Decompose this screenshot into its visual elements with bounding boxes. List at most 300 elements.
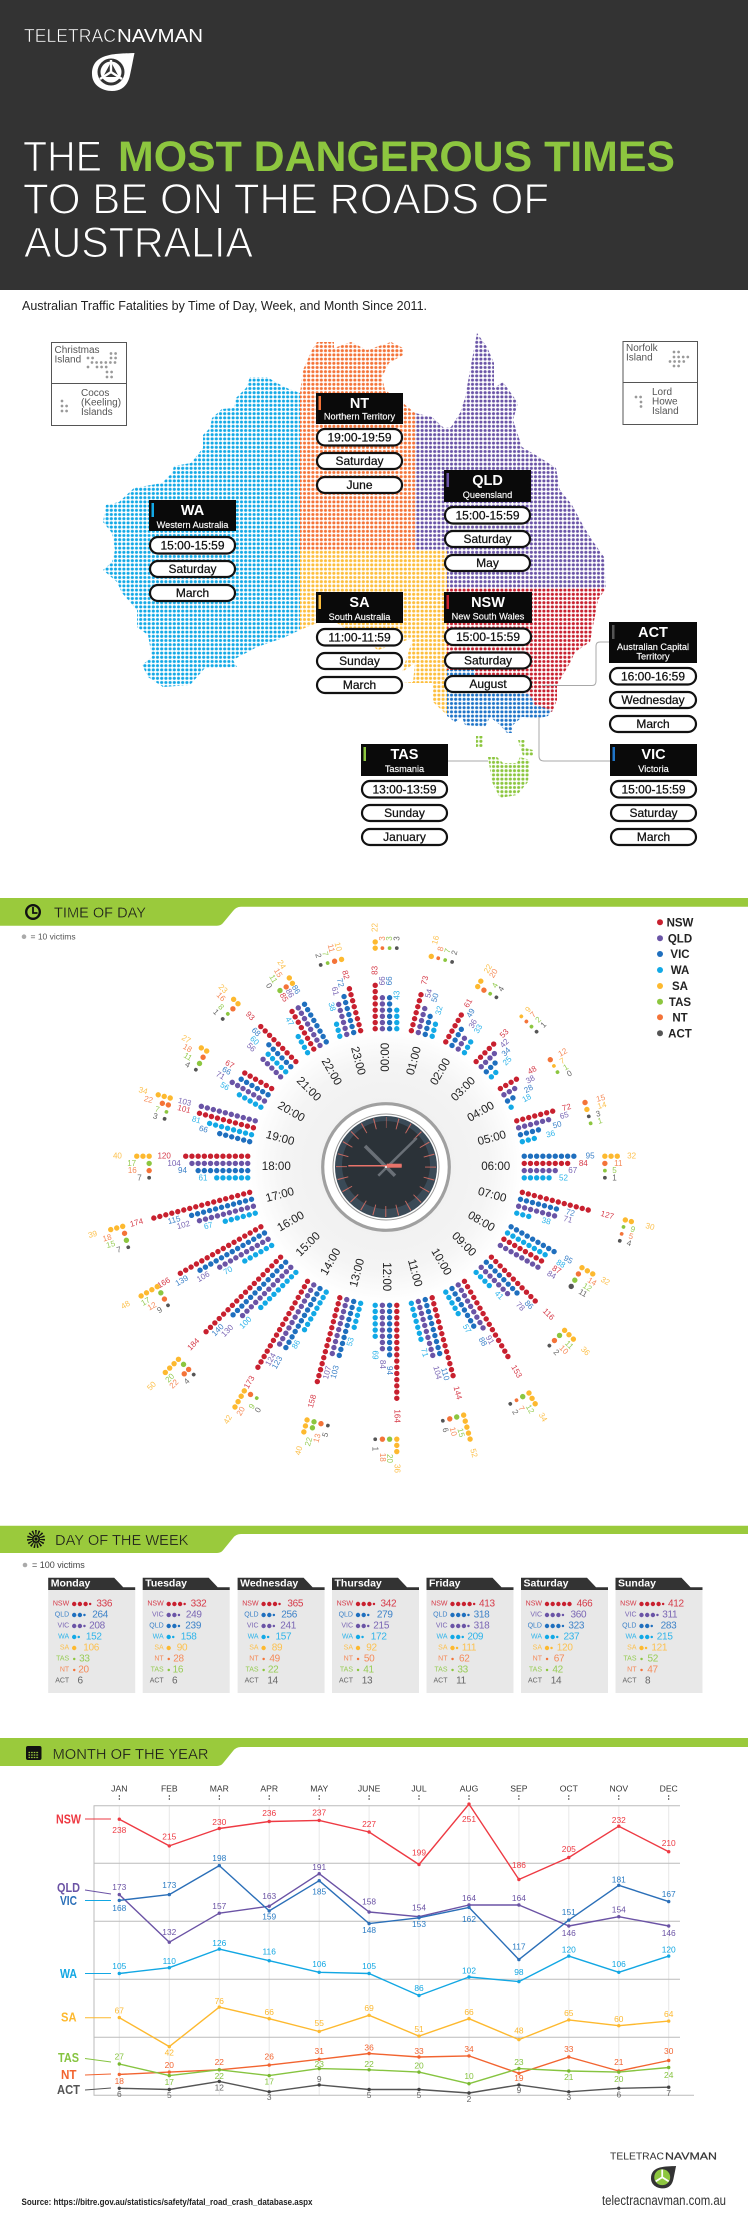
panel: Saturday: NSW	[526, 1600, 542, 1608]
month axis labels: JAN	[111, 1784, 127, 1794]
hour 03:00: 53	[498, 1027, 511, 1040]
series: SA: 65	[564, 2008, 574, 2018]
panel: Thursday: 172	[371, 1632, 387, 1642]
hour 07:00: 127	[600, 1209, 615, 1221]
hour 05:00: 1	[597, 1116, 604, 1126]
hour 09:00	[443, 1224, 592, 1373]
callout: NSW	[444, 592, 532, 692]
series: NT: 26	[265, 2052, 274, 2062]
section heading: Time of Day	[0, 898, 748, 926]
callout: ACT: Australian Capital	[617, 642, 689, 652]
hour 20:00: 27	[180, 1033, 193, 1046]
panel: Sunday: 311	[662, 1610, 678, 1620]
series: TAS: 20	[414, 2061, 424, 2071]
callout: VIC	[610, 744, 697, 845]
hour 22:00: 86	[284, 987, 296, 1000]
section heading: Time of Day: TIME OF DAY	[54, 904, 146, 922]
hour 14:00: 42	[222, 1413, 234, 1426]
hour 01:00: 32	[434, 1004, 445, 1016]
hour 02:00: 20	[487, 967, 500, 980]
panel: Thursday: TAS	[340, 1666, 353, 1674]
panel: Wednesday: 49	[269, 1654, 281, 1664]
hour 23:00: 61	[330, 986, 341, 997]
hour 11:00: 11:00	[405, 1258, 424, 1288]
section heading: Month of the Year: MONTH OF THE YEAR	[52, 1746, 209, 1763]
panel: Friday: QLD	[433, 1612, 448, 1618]
chart: fatalities by hour, radial dot rows	[87, 923, 656, 1473]
hour 19:00: 101	[176, 1103, 192, 1115]
hour 18:00: 94	[178, 1166, 188, 1175]
hour 11:00: 52	[468, 1448, 479, 1459]
hour 07:00: 4	[626, 1238, 633, 1248]
footer wordmark: TELETRAC	[610, 2150, 664, 2162]
series: VIC: 162	[462, 1914, 476, 1924]
panel: dot map of Australia	[52, 333, 698, 845]
series: NSW: 251	[462, 1814, 476, 1824]
panel: Friday: TAS	[434, 1666, 448, 1674]
series: WA: 120	[562, 1945, 576, 1955]
series: NSW: 237	[312, 1808, 327, 1818]
series: NSW: 238	[112, 1825, 127, 1835]
panel: Wednesday: 14	[267, 1676, 279, 1686]
legend: states: NT	[672, 1012, 688, 1024]
callout: SA: SA	[349, 595, 370, 611]
hour 00:00	[371, 923, 401, 1072]
brand wordmark	[24, 26, 203, 46]
hour 05:00: 15	[595, 1093, 607, 1104]
hour 16:00: 70	[222, 1264, 235, 1277]
hour 11:00: 144	[452, 1385, 464, 1401]
hour 16:00: 16:00	[275, 1209, 307, 1234]
series: TAS: 10	[464, 2071, 474, 2081]
callout: QLD	[444, 470, 531, 571]
panel: Tuesday: 16	[173, 1664, 184, 1676]
hour 10:00: 10:00	[428, 1246, 453, 1278]
panel: Sunday: 121	[651, 1642, 668, 1654]
panel: Saturday: SA	[533, 1644, 542, 1652]
hour 20:00: 11	[182, 1051, 194, 1063]
panel: Thursday: 215	[373, 1620, 390, 1632]
region: WA	[103, 377, 300, 687]
hour 14:00: 20	[235, 1405, 247, 1417]
hour 08:00: 11	[577, 1287, 589, 1299]
hour 01:00: 16	[430, 934, 441, 946]
title	[23, 133, 675, 267]
inset: Norfolk and Lord Howe Islands: Island	[626, 352, 653, 364]
hour 03:00: 9	[523, 1004, 533, 1014]
panel: Saturday: VIC	[530, 1612, 542, 1618]
series: QLD: 164	[462, 1893, 476, 1903]
hour 02:00: 36	[467, 1017, 479, 1030]
panel: Tuesday: TAS	[151, 1666, 164, 1674]
month axis labels: APR	[260, 1784, 278, 1794]
callout: NT: 19:00-19:59	[327, 430, 392, 444]
hour 14:00: 14:00	[319, 1246, 344, 1278]
hour 20:00: 71	[214, 1069, 227, 1082]
panel: Monday: 6	[78, 1676, 84, 1686]
panel: Monday: QLD	[55, 1612, 69, 1618]
callout: VIC: VIC	[641, 747, 666, 763]
hour 00:00: 3	[378, 936, 387, 941]
hour 21:00: 68	[250, 1026, 263, 1039]
panel: Saturday: TAS	[529, 1666, 542, 1674]
callout: ACT: ACT	[638, 625, 668, 641]
chart: fatalities by month, line chart	[56, 1784, 694, 2104]
hour 12:00: 1	[371, 1447, 380, 1452]
hour 11:00: 15	[455, 1427, 467, 1439]
hour 06:00: 06:00	[481, 1161, 510, 1173]
hour 23:00: 38	[326, 1001, 338, 1013]
hour 13:00: 13	[312, 1432, 323, 1444]
callout: SA: March	[343, 678, 376, 692]
hour 05:00: 72	[561, 1102, 573, 1113]
hour 04:00	[461, 1046, 580, 1133]
hour 08:00: 88	[555, 1258, 567, 1270]
hour 12:00: 69	[371, 1351, 380, 1360]
panel: Saturday: Saturday	[524, 1578, 569, 1590]
hour 09:00: 116	[541, 1307, 557, 1322]
callout: SA: South Australia	[329, 612, 391, 622]
series: NT: 21	[614, 2057, 624, 2067]
callout: VIC: March	[637, 830, 670, 844]
panel: Tuesday: 6	[172, 1676, 178, 1686]
hour 03:00	[443, 1004, 549, 1110]
hour 11:00: 110	[439, 1367, 451, 1382]
series: QLD: 154	[612, 1905, 626, 1915]
hour 07:00: 9	[630, 1224, 637, 1234]
icon: footer logo	[651, 2166, 676, 2188]
callout: VIC: Victoria	[638, 764, 670, 774]
series: TAS: 23	[315, 2059, 324, 2069]
month axis labels: MAY	[310, 1784, 328, 1794]
hour 21:00: 93	[244, 1010, 257, 1023]
hour 15:00: 184	[186, 1336, 202, 1352]
series: WA: 86	[414, 1983, 424, 1993]
panel: Sunday	[616, 1578, 702, 1693]
series: ACT	[57, 2074, 671, 2104]
hour 00:00: 00:00	[380, 1043, 392, 1072]
series: VIC	[60, 1853, 676, 1960]
hour 11:00	[396, 1255, 479, 1465]
series: QLD: 146	[562, 1928, 576, 1938]
series: NT: 33	[414, 2046, 424, 2056]
hour 02:00: 49	[465, 1007, 477, 1019]
series: TAS	[58, 2051, 674, 2087]
panel: Saturday: 360	[570, 1610, 587, 1620]
series: NT: 33	[564, 2044, 574, 2054]
hour 23:00: 23:00	[348, 1045, 367, 1077]
hour 14:00: 9	[247, 1402, 257, 1411]
series: ACT: 12	[215, 2083, 224, 2093]
panel: Monday: Monday	[51, 1578, 91, 1590]
series: ACT: 3	[566, 2092, 571, 2102]
hour 04:00: 0	[565, 1068, 574, 1079]
month axis labels: JUNE	[358, 1784, 381, 1794]
hour 03:00: 25	[501, 1054, 514, 1067]
series: QLD: 158	[362, 1897, 376, 1907]
hour 20:00: 66	[220, 1065, 233, 1077]
hour 03:00: 42	[498, 1037, 511, 1050]
month axis labels	[111, 1784, 678, 1794]
legend: states: ACT	[668, 1028, 692, 1040]
series: QLD: 164	[512, 1893, 526, 1903]
panel: Sunday: 412	[668, 1598, 685, 1610]
panel: Wednesday: WA	[248, 1634, 259, 1640]
hour 21:00: 8	[216, 1002, 226, 1012]
hour 03:00: 7	[528, 1010, 538, 1019]
hour 18:00	[113, 1152, 291, 1182]
hour 03:00: 34	[500, 1045, 513, 1058]
series: TAS: 27	[115, 2052, 124, 2062]
panel: Saturday: 237	[564, 1632, 580, 1642]
icon: sun	[30, 1532, 42, 1546]
hour 16:00: 166	[156, 1275, 172, 1290]
callout: WA: Saturday	[168, 562, 217, 576]
panel: Saturday: 120	[557, 1642, 573, 1654]
panel: Friday: 62	[459, 1654, 470, 1664]
callout: WA: WA	[181, 503, 205, 519]
callout: TAS: Tasmania	[385, 764, 425, 774]
hour 21:00: 21:00	[294, 1075, 323, 1104]
hour 14:00: 123	[270, 1354, 285, 1371]
hour 12:00	[371, 1262, 401, 1473]
series: WA: 106	[612, 1959, 626, 1969]
title: THE	[23, 133, 102, 181]
hour 04:00: 38	[524, 1073, 537, 1086]
series: NT: 22	[215, 2057, 224, 2067]
hour 04:00: 04:00	[465, 1100, 497, 1125]
connector: TAS	[448, 760, 488, 762]
callout: QLD: Queensland	[463, 490, 512, 500]
callout: NT: Saturday	[335, 454, 384, 468]
panel: Tuesday: WA	[153, 1634, 164, 1640]
hour 13:00: 22	[303, 1436, 314, 1447]
hour 16:00: 17	[140, 1295, 152, 1308]
series: WA: 105	[362, 1961, 376, 1971]
hour 09:00: 86	[523, 1298, 536, 1312]
hour 15:00: 15:00	[294, 1230, 323, 1259]
panel: Monday: 336	[96, 1598, 113, 1610]
hour 10:00: 88	[477, 1336, 489, 1348]
hour 07:00: 30	[645, 1221, 656, 1232]
hour 04:00: 7	[558, 1056, 567, 1066]
panel: Wednesday: VIC	[247, 1622, 259, 1630]
legend: states: VIC	[670, 949, 690, 961]
panel: Tuesday: ACT	[150, 1678, 164, 1684]
series: SA: 69	[364, 2003, 374, 2013]
panel: Sunday: Sunday	[618, 1578, 656, 1590]
callout: QLD: 15:00-15:59	[455, 508, 520, 522]
panel: Sunday: 215	[657, 1632, 673, 1642]
series: WA: 102	[462, 1966, 476, 1976]
hour 08:00: 12	[581, 1281, 594, 1294]
hour 20:00: 20:00	[275, 1100, 307, 1125]
callout: TAS: Sunday	[384, 806, 425, 820]
panel: Sunday: SA	[627, 1644, 637, 1652]
hour 22:00: 24	[275, 958, 288, 971]
icon: calendar	[26, 1746, 42, 1760]
panel: Wednesday: 22	[268, 1664, 279, 1676]
hour 17:00: 115	[167, 1214, 182, 1226]
panel: Monday: 208	[89, 1620, 106, 1632]
hour 08:00	[461, 1201, 612, 1306]
hour 05:00: 05:00	[476, 1129, 508, 1148]
hour 05:00	[474, 1093, 612, 1157]
panel: Friday: ACT	[434, 1678, 448, 1684]
hour 04:00: 28	[522, 1082, 535, 1095]
panel: Sunday: 52	[648, 1654, 659, 1664]
panel: Tuesday: NT	[154, 1656, 164, 1662]
hour 00:00: 3	[385, 936, 394, 941]
hour 20:00: 4	[183, 1060, 192, 1070]
series: WA: 126	[212, 1938, 227, 1948]
hour 10:00: 57	[461, 1323, 473, 1335]
panel: Saturday: 466	[577, 1598, 593, 1610]
inset: Christmas and Cocos Islands: Cocos	[81, 388, 109, 399]
hour 02:00: 33	[472, 1022, 485, 1035]
callout: TAS: TAS	[391, 747, 419, 763]
panel: Friday: NSW	[431, 1600, 448, 1608]
series: WA: 98	[514, 1967, 524, 1977]
hour 03:00: 1	[539, 1020, 549, 1030]
hour 23:00: 10	[333, 941, 344, 953]
hour 13:00	[293, 1255, 376, 1462]
hour 18:00: 18:00	[262, 1161, 291, 1173]
panel: Wednesday: NSW	[242, 1600, 259, 1608]
hour 08:00: 84	[545, 1269, 558, 1281]
series: NT: 19	[514, 2073, 524, 2083]
icon: logo drop	[92, 53, 134, 91]
panel: Saturday	[521, 1578, 608, 1693]
hour 03:00: 2	[534, 1015, 543, 1025]
hour 14:00	[222, 1242, 352, 1436]
series: VIC: 168	[112, 1903, 127, 1913]
hour 15:00: 130	[219, 1323, 236, 1339]
panel: Friday: 413	[479, 1598, 496, 1610]
callout: TAS	[361, 744, 448, 845]
panel: Thursday: NSW	[337, 1600, 353, 1608]
panel: Friday: NT	[438, 1656, 448, 1662]
series: QLD: 146	[662, 1928, 676, 1938]
panel: Tuesday: 332	[191, 1598, 207, 1610]
panel: Wednesday: 241	[280, 1620, 297, 1632]
hour 19:00: 81	[191, 1114, 202, 1126]
section heading: Day of the Week	[0, 1526, 748, 1553]
series: NSW: 210	[662, 1838, 676, 1848]
hour 20:00: 56	[219, 1080, 231, 1093]
inset: Christmas and Cocos Islands: Island	[54, 354, 81, 366]
hour 15:00: 20	[164, 1371, 177, 1384]
hour 12:00: 36	[392, 1464, 401, 1473]
series: NT: NT	[61, 2068, 77, 2082]
hour 16:00: 106	[195, 1269, 212, 1284]
panel: Wednesday: QLD	[244, 1612, 259, 1618]
series: SA	[61, 1996, 674, 2058]
hour 19:00: 103	[177, 1096, 193, 1108]
panel: Thursday: Thursday	[334, 1578, 382, 1590]
month axis labels: OCT	[560, 1784, 579, 1794]
hour 15:00: 22	[168, 1377, 181, 1390]
series: NSW: 227	[362, 1819, 376, 1829]
callout: VIC: Saturday	[629, 806, 678, 820]
callout: TAS: January	[383, 830, 426, 844]
callout: SA: Sunday	[339, 654, 380, 668]
inset: Christmas and Cocos Islands	[52, 342, 126, 426]
panel: Tuesday	[143, 1578, 230, 1693]
hour 12:00: 164	[392, 1409, 401, 1423]
series: ACT: 6	[117, 2089, 122, 2099]
panel: Saturday: 323	[568, 1620, 585, 1632]
series: NSW: NSW	[56, 1812, 81, 1826]
hour 11:00: 10	[448, 1426, 459, 1438]
series: ACT: 5	[367, 2090, 372, 2100]
hour 10:00	[420, 1242, 549, 1435]
callout: WA: 15:00-15:59	[160, 538, 225, 552]
connector: VIC	[539, 717, 610, 761]
hour 02:00: 61	[462, 997, 475, 1009]
panel: Wednesday: TAS	[245, 1666, 259, 1674]
hour 05:00: 14	[597, 1100, 608, 1111]
title: MOST DANGEROUS TIMES	[118, 133, 675, 181]
callout: ACT: Territory	[636, 652, 670, 662]
hour 00:00: 66	[385, 976, 394, 985]
series: ACT: 2	[467, 2094, 472, 2104]
panel: Monday: 152	[86, 1632, 102, 1642]
panel: Sunday: NSW	[620, 1600, 637, 1608]
panel: Wednesday: 256	[281, 1610, 298, 1620]
panel: Saturday: WA	[531, 1634, 542, 1640]
hour 10:00: 2	[510, 1408, 520, 1417]
series: VIC: 181	[612, 1875, 626, 1885]
hour 01:00	[396, 934, 462, 1079]
hour 09:00: 10	[557, 1343, 570, 1357]
inset: Christmas and Cocos Islands: Islands	[81, 407, 113, 418]
hour 13:00: 40	[293, 1445, 304, 1456]
hour 04:00: 12	[557, 1046, 569, 1059]
hour 14:00: 124	[263, 1351, 278, 1368]
hour 23:00	[312, 941, 376, 1079]
hour 05:00: 36	[545, 1128, 557, 1140]
panel: Tuesday: SA	[154, 1644, 164, 1652]
series: QLD: 163	[262, 1891, 277, 1901]
series: NT: 34	[464, 2044, 474, 2054]
region: NSW	[447, 588, 606, 712]
series: WA: 105	[112, 1961, 127, 1971]
series: ACT: 9	[517, 2085, 522, 2095]
callout: NSW: NSW	[471, 595, 505, 611]
series: TAS: 23	[514, 2057, 524, 2067]
hour 06:00: 11	[614, 1159, 623, 1168]
hour 18:00: 120	[157, 1152, 171, 1161]
hour 02:00: 4	[490, 981, 500, 990]
panel: Wednesday: NT	[249, 1656, 259, 1662]
panel: Thursday: SA	[344, 1644, 353, 1652]
legend: states: SA	[672, 981, 688, 993]
hour 08:00: 08:00	[465, 1209, 497, 1234]
hour 11:00: 71	[419, 1347, 430, 1359]
callout: ACT: Wednesday	[621, 693, 685, 707]
hour 18:00: 17	[127, 1159, 137, 1168]
legend: states	[657, 918, 694, 1040]
series: VIC: 151	[562, 1907, 576, 1917]
series: SA: 55	[315, 2018, 324, 2028]
hour 19:00: 66	[198, 1124, 209, 1135]
month axis labels: FEB	[161, 1784, 178, 1794]
month axis labels: SEP	[510, 1784, 528, 1794]
hour 00:00: 43	[392, 990, 401, 1000]
panel: Saturday: 67	[554, 1654, 565, 1664]
panel: Thursday: WA	[342, 1634, 353, 1640]
